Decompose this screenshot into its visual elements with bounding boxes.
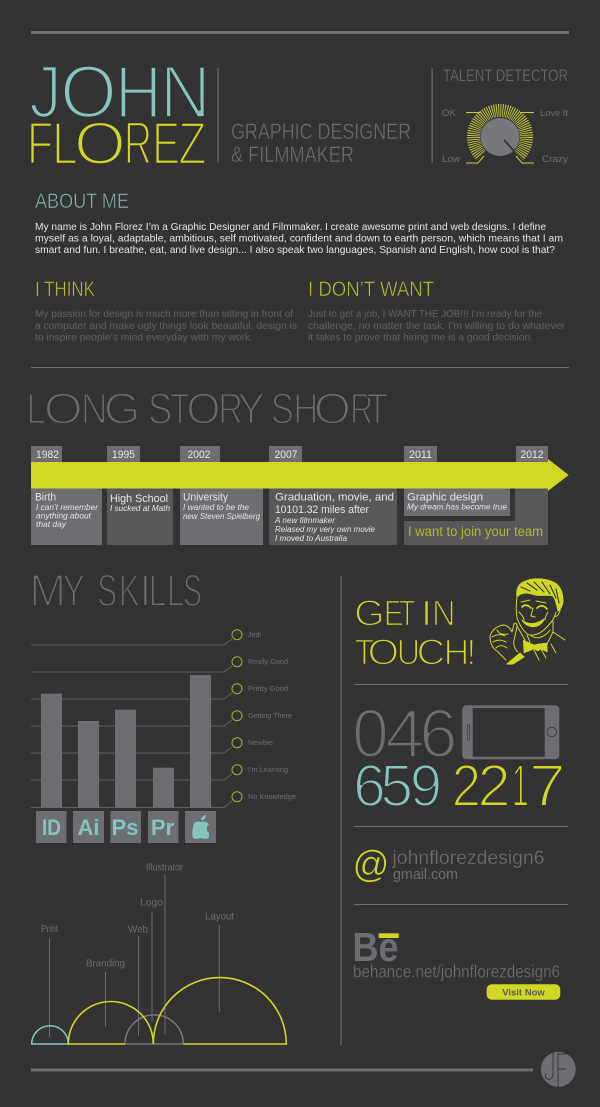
title: name: R	[124, 110, 152, 177]
chart: semicircle skills	[32, 862, 286, 1044]
i think paragraph: a computer and make ugly things look beautiful, design is	[35, 320, 297, 332]
heading: long story short: R	[218, 384, 243, 434]
panel: graphic design and join team	[404, 488, 548, 545]
title: name: N	[160, 50, 211, 133]
skill labels: Web	[128, 924, 148, 936]
job title: & FILMMAKER	[231, 142, 354, 167]
bar chart: skills	[31, 630, 296, 808]
panel: university: University	[183, 492, 228, 504]
year tabs: 2002	[188, 449, 210, 461]
heading: my skills: Y	[63, 565, 85, 616]
panel: university: new Steven Spielberg	[183, 512, 261, 521]
heading: get in touch: U	[397, 632, 420, 673]
skill labels	[41, 862, 234, 970]
icon: apple	[192, 815, 209, 839]
heading: about me: ABOUT ME	[35, 190, 129, 213]
heading: long story short: O	[314, 384, 351, 434]
panel: birth	[31, 488, 102, 545]
heading: long story short: R	[350, 384, 373, 434]
level labels: Really Good	[248, 657, 288, 666]
panel: graduation: Graduation, movie, and	[275, 492, 394, 504]
skill labels: Logo	[140, 897, 163, 909]
semicircle: web	[125, 1015, 183, 1044]
panel: high school: High School	[110, 493, 168, 505]
heading: my skills: S	[183, 565, 202, 616]
year tabs: 1982	[36, 449, 59, 461]
skill labels: Branding	[86, 958, 125, 970]
level labels: Getting There	[248, 711, 292, 720]
i don't want	[308, 278, 565, 344]
title: name	[27, 50, 211, 177]
panel: graphic design and join team: I want to join your team	[408, 524, 543, 539]
i don't want paragraph: it takes to prove that hiring me is a good decision.	[308, 332, 533, 344]
phone number: 4	[385, 695, 424, 772]
talent detector	[442, 66, 568, 175]
panel: graduation: Relased my very own movie	[275, 525, 376, 534]
skill labels: Layout	[205, 910, 234, 922]
software icons: Pr	[151, 815, 175, 840]
icon: phone	[462, 705, 559, 759]
about me paragraph: My name is John Florez I’m a Graphic Designer and Filmmaker. I create awesome print and web designs. I define	[35, 221, 546, 233]
heading: get in touch: T	[399, 593, 416, 634]
software icons: Ai	[78, 815, 100, 840]
heading: get in touch: H	[444, 632, 469, 673]
level markers	[232, 630, 242, 802]
panel: graduation: A new filmmaker	[274, 516, 335, 525]
panel: graduation: I moved to Australia	[275, 534, 348, 543]
heading: long story short: H	[293, 384, 318, 434]
button: visit now: Visit Now	[502, 988, 545, 998]
heading: get in touch: E	[384, 593, 404, 634]
heading: long story short: T	[367, 384, 388, 434]
year tabs: 2011	[409, 449, 432, 461]
panel: graduation: 10101.32 miles after	[275, 504, 369, 516]
heading: get in touch: G	[354, 593, 385, 634]
heading: my skills: I	[140, 565, 151, 616]
heading: long story short: G	[104, 384, 140, 434]
about me paragraph: smart and fun. I breathe, eat, and live design... I also speak two languages, Spanish and English, how cool is that?	[35, 244, 555, 256]
heading: get in touch: !	[466, 632, 476, 673]
bars	[41, 675, 211, 808]
icon: retro man	[490, 579, 565, 664]
heading: my skills: L	[167, 565, 184, 616]
job title: GRAPHIC DESIGNER	[231, 119, 411, 144]
email: gmail.com	[393, 867, 458, 883]
title: name: Z	[178, 110, 206, 177]
level labels: Jedi	[248, 630, 261, 639]
i don't want paragraph: challenge, no matter the task, I’m willing to do whatever	[308, 320, 565, 332]
software icons: ID	[42, 815, 61, 840]
timeline	[31, 446, 569, 545]
skill labels: Illustrator	[146, 862, 183, 874]
title: name: E	[152, 110, 180, 177]
job title	[231, 119, 411, 167]
heading: i don't want: I DON’T WANT	[308, 278, 434, 301]
panel: graphic design and join team: Graphic design	[407, 492, 483, 504]
semicircle: print	[32, 1026, 68, 1044]
panel: high school: I sucked at Math	[110, 504, 171, 513]
year tabs: 1995	[112, 449, 135, 461]
heading: long story short: L	[26, 384, 46, 434]
i don't want paragraph	[308, 308, 565, 344]
icon: dial knob	[462, 110, 538, 175]
phone number: 6	[419, 695, 458, 772]
i don't want paragraph: Just to get a job, I WANT THE JOB!!! I’m ready for the	[308, 308, 542, 320]
semicircle: layout	[153, 978, 286, 1044]
email	[352, 844, 544, 886]
heading: get in touch	[354, 593, 476, 673]
about me	[35, 190, 563, 256]
heading: long story short: O	[186, 384, 221, 434]
icon: at sign: @	[352, 844, 390, 886]
heading: get in touch: O	[368, 632, 399, 673]
behance	[352, 924, 560, 1000]
heading: talent detector: TALENT DETECTOR	[443, 66, 568, 85]
heading: long story short: S	[271, 384, 294, 434]
arrow	[31, 459, 569, 491]
i think paragraph: to inspire people’s mind everyday with my work.	[35, 332, 253, 344]
phone number: 7	[529, 753, 566, 819]
panel: university: I wanted to be the	[183, 503, 250, 512]
heading: long story short: Y	[237, 384, 265, 434]
title: name: H	[115, 50, 162, 133]
dial labels: Low	[442, 154, 460, 165]
heading: my skills: M	[29, 565, 66, 616]
dial labels: OK	[442, 108, 457, 119]
panel: birth: I can’t remember	[36, 503, 98, 512]
icon: JF monogram	[541, 1052, 576, 1087]
heading: get in touch: N	[432, 593, 456, 634]
title: name: O	[60, 50, 117, 133]
title: name: O	[74, 110, 126, 177]
title: name: L	[52, 110, 78, 177]
year tabs	[31, 446, 548, 463]
dial labels: Crazy	[542, 154, 568, 165]
panel: graduation	[269, 488, 397, 545]
year tabs: 2012	[520, 449, 544, 461]
dial labels	[442, 108, 568, 165]
level labels: No Knowledge	[248, 792, 296, 801]
leader lines	[50, 875, 219, 1037]
dial labels: Love It	[540, 108, 568, 119]
panel: birth: anything about	[36, 512, 92, 521]
about me paragraph: myself as a loyal, adaptable, ambitious, self motivated, confident and down to earth person, which means that I am	[35, 232, 563, 244]
phone number	[352, 695, 566, 819]
software icons: Ps	[112, 815, 138, 840]
panel: graphic design and join team: My dream has become true	[407, 502, 508, 512]
heading: long story short: N	[81, 384, 108, 434]
phone number: 2	[452, 753, 481, 819]
panel: university	[180, 488, 263, 545]
phone number: 5	[380, 753, 413, 819]
panel: birth: Birth	[35, 492, 56, 504]
heading: my skills: L	[149, 565, 166, 616]
button: visit now	[487, 984, 560, 1000]
level labels: Pretty Good	[248, 684, 288, 693]
title: name: F	[27, 110, 53, 177]
email: johnflorezdesign6	[392, 847, 544, 869]
heading: long story short: S	[148, 384, 172, 434]
heading: get in touch: C	[416, 632, 445, 673]
i think paragraph	[35, 308, 297, 344]
phone number: 9	[410, 753, 442, 819]
year tabs: 2007	[274, 449, 298, 461]
level labels	[248, 630, 296, 801]
i think	[35, 278, 297, 344]
heading: my skills: S	[97, 565, 117, 616]
panel: high school	[107, 488, 173, 545]
phone number: 6	[353, 753, 386, 819]
panel: birth: that day	[36, 520, 67, 529]
phone number: 0	[352, 695, 389, 772]
footer rule	[31, 1068, 533, 1072]
heading: get in touch: T	[355, 632, 374, 673]
semicircle: branding	[68, 1002, 153, 1044]
heading: my skills: K	[119, 565, 140, 616]
heading: long story short: O	[44, 384, 83, 434]
heading: get in touch: I	[420, 593, 433, 634]
title: name: J	[29, 50, 62, 133]
i think paragraph: My passion for design is much more than sitting in front of	[35, 308, 293, 320]
phone number: 1	[512, 753, 529, 819]
heading: i think: I THINK	[35, 278, 95, 301]
level labels: I’m Learning	[248, 765, 288, 774]
behance: behance.net/johnflorezdesign6	[353, 962, 560, 982]
level labels: Newbie	[248, 738, 273, 747]
phone number: 2	[478, 753, 511, 819]
icon: behance logo: Be	[352, 924, 398, 970]
skill labels: Print	[41, 923, 58, 935]
heading: long story short: T	[170, 384, 190, 434]
software icons	[36, 811, 216, 843]
about me paragraph	[35, 221, 563, 256]
